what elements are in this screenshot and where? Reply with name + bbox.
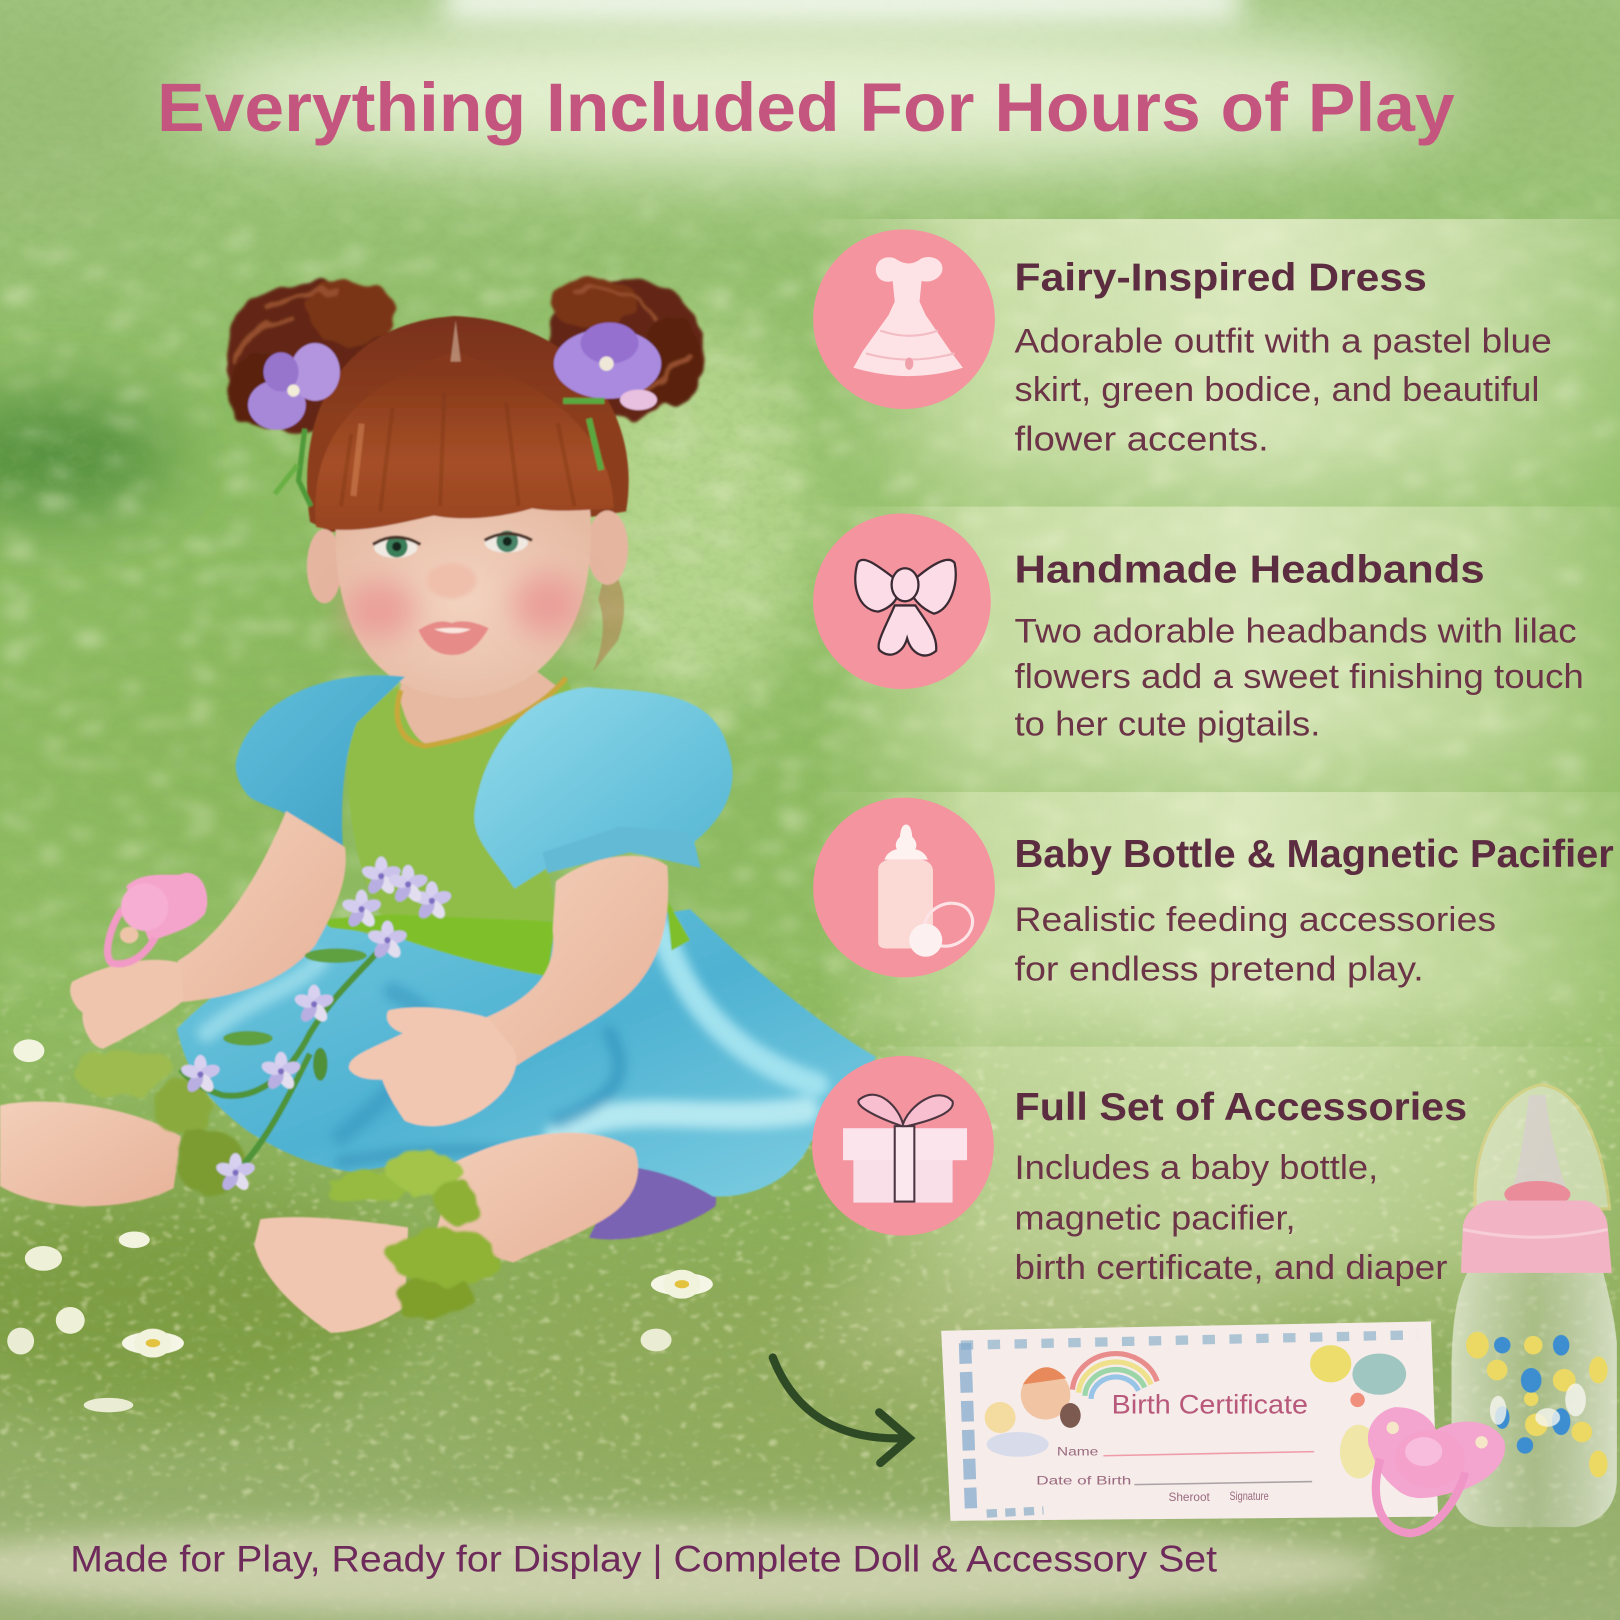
feature text: bottle and pacifier: Baby Bottle & Magnetic Pacifier	[1015, 832, 1614, 876]
feature text: dress: Adorable outfit with a pastel blue	[1015, 322, 1552, 360]
pacifier photo	[1368, 1407, 1505, 1533]
bottle photo	[1452, 1085, 1617, 1527]
icon: gift box	[812, 1056, 994, 1236]
neck	[398, 672, 558, 746]
right sleeve	[474, 687, 733, 889]
skirt	[177, 909, 876, 1197]
certificate fields: Name	[1057, 1445, 1098, 1459]
footer wash	[0, 1521, 1384, 1616]
feature text: accessories: Full Set of Accessories	[1015, 1085, 1467, 1129]
certificate fields: Sheroot	[1169, 1490, 1210, 1504]
feature text: bottle and pacifier	[1015, 832, 1614, 988]
back curl of hair	[593, 563, 624, 672]
title: Everything Included For Hours of Play	[157, 70, 1455, 146]
nose	[427, 563, 476, 598]
birth certificate	[941, 1321, 1438, 1521]
left hand	[70, 960, 184, 1049]
feature text: accessories: birth certificate, and diaper	[1015, 1249, 1447, 1287]
certificate fields	[1036, 1445, 1269, 1504]
feature text: dress: skirt, green bodice, and beautiful	[1015, 371, 1539, 409]
necklace	[397, 678, 566, 746]
right hair flower	[554, 322, 661, 470]
mouth	[418, 621, 489, 655]
hair buns	[223, 275, 703, 431]
feature text: dress	[1015, 255, 1552, 458]
head hair cap	[307, 316, 629, 532]
left ear	[307, 529, 342, 603]
held pacifier	[108, 873, 207, 964]
right hand	[349, 1007, 516, 1126]
left hair flower	[248, 343, 340, 506]
icon: bow	[813, 513, 991, 689]
feature text: headbands: to her cute pigtails.	[1015, 706, 1320, 744]
feature text: dress: flower accents.	[1015, 420, 1269, 458]
feature text: headbands: Handmade Headbands	[1015, 548, 1485, 592]
certificate fields: Signature	[1229, 1489, 1269, 1503]
eyes	[373, 531, 532, 558]
right arm	[486, 856, 668, 1069]
doll	[0, 275, 876, 1333]
feature text: bottle and pacifier: for endless pretend play.	[1015, 950, 1424, 988]
cheeks	[345, 573, 583, 638]
icon: bottle and pacifier	[813, 798, 995, 977]
right ankle ruffle	[323, 1150, 503, 1318]
fringe	[315, 351, 614, 530]
icon: dress	[813, 229, 995, 409]
top light glow	[176, 0, 1457, 170]
certificate fields: Date of Birth	[1036, 1474, 1131, 1488]
right foot	[254, 1217, 408, 1333]
left leg and foot	[0, 1102, 181, 1206]
feature text: accessories: magnetic pacifier,	[1015, 1199, 1296, 1237]
feature text: headbands: flowers add a sweet finishing touch	[1015, 658, 1584, 696]
right leg	[434, 1133, 638, 1263]
curved arrow	[773, 1358, 909, 1463]
bodice	[347, 680, 579, 930]
purple bloomers	[589, 1134, 716, 1240]
panel washes	[816, 219, 1620, 1364]
feature text: headbands	[1015, 548, 1584, 744]
right ear	[587, 510, 628, 585]
green belt	[320, 899, 690, 976]
flower vine	[179, 856, 453, 1193]
feature text: accessories: Includes a baby bottle,	[1015, 1149, 1378, 1187]
footer tagline: Made for Play, Ready for Display | Complete Doll & Accessory Set	[70, 1537, 1218, 1579]
feature text: accessories	[1015, 1085, 1467, 1287]
certificate heading: Birth Certificate	[1112, 1389, 1308, 1419]
feature text: headbands: Two adorable headbands with lilac	[1015, 613, 1577, 651]
face	[336, 496, 591, 698]
left ankle ruffle	[74, 1048, 245, 1192]
feature text: bottle and pacifier: Realistic feeding accessories	[1015, 901, 1496, 939]
left arm	[178, 811, 346, 1002]
daisies on grass	[7, 1039, 713, 1412]
left sleeve	[236, 675, 405, 849]
feature text: dress: Fairy-Inspired Dress	[1015, 255, 1427, 299]
